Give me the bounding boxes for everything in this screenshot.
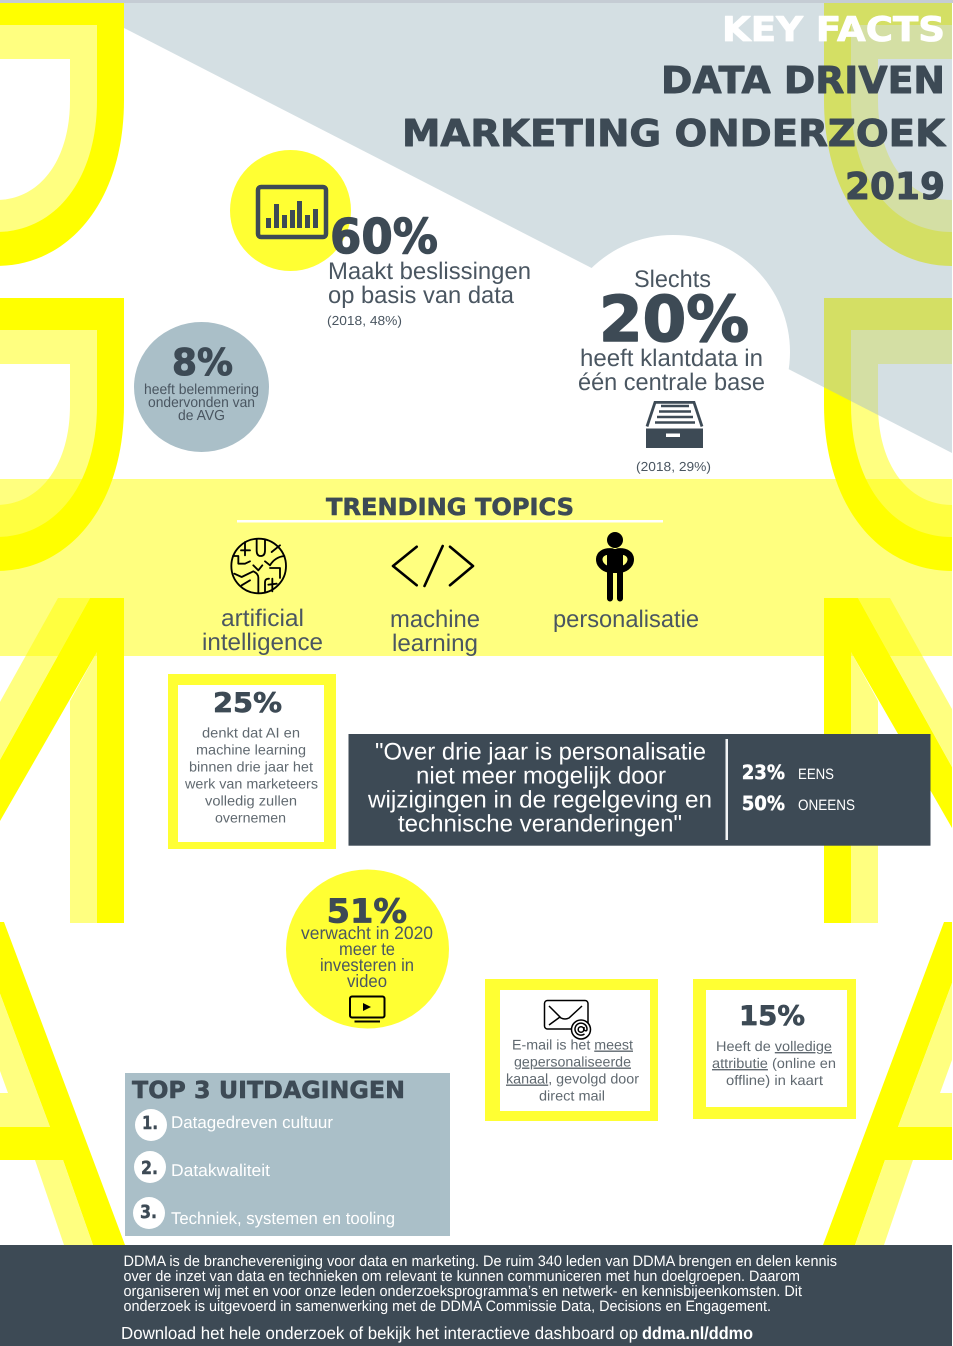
stat description: heeft belemmering: [144, 382, 259, 398]
poll: oneens: ONEENS: [798, 797, 855, 814]
stat description: Maakt beslissingen: [328, 258, 531, 285]
quote: technische veranderingen": [398, 811, 682, 838]
stat description: denkt dat AI en: [202, 724, 300, 740]
topic: machine learning: [390, 606, 480, 657]
quote: "Over drie jaar is personalisatie: [375, 738, 706, 765]
panel: footer: [0, 1245, 952, 1346]
item 1: [135, 1109, 333, 1141]
icon: archive drawer: [646, 402, 703, 448]
panel: e-mail box: [485, 979, 658, 1121]
stat description: investeren in: [320, 955, 414, 975]
download link: Download het hele onderzoek of bekijk het interactieve dashboard op: [121, 1323, 638, 1343]
stat description: [301, 923, 433, 991]
item 3: 3.: [140, 1202, 157, 1223]
heading: TOP 3 UITDAGINGEN: [132, 1076, 405, 1104]
panel: 25% stat box: [168, 674, 336, 849]
title: KEY FACTS: [722, 10, 945, 50]
stat description: heeft klantdata in: [580, 345, 763, 372]
text: gepersonaliseerde: [514, 1054, 631, 1070]
poll: eens: [742, 761, 834, 784]
icon: code brackets: [393, 546, 473, 586]
stat description: meer te: [339, 939, 395, 959]
item 3: Techniek, systemen en tooling: [171, 1209, 395, 1228]
stat description: binnen drie jaar het: [189, 758, 313, 774]
about text: DDMA is de branchevereniging voor data en marketing. De ruim 340 leden van DDMA brengen en delen kennis: [124, 1253, 837, 1270]
stat description: [328, 258, 531, 309]
title: [402, 10, 946, 208]
stat description: offline) in kaart: [726, 1072, 823, 1088]
stat value: 15%: [739, 1001, 805, 1032]
panel: top 3 uitdagingen: [125, 1073, 450, 1236]
quote: niet meer mogelijk door: [416, 762, 666, 789]
stat description: attributie (online en: [712, 1055, 836, 1071]
comparison note: (2018, 48%): [327, 313, 402, 328]
stat description: overnemen: [215, 810, 286, 826]
poll: oneens: 50%: [742, 792, 785, 815]
title: MARKETING ONDERZOEK: [402, 112, 946, 155]
stat description: volledig zullen: [205, 792, 297, 808]
stat description: video: [347, 971, 387, 991]
stat value: 8%: [172, 341, 233, 384]
title: DATA DRIVEN: [661, 59, 945, 102]
panel: 20% stat: [556, 235, 790, 474]
icon: person: [599, 532, 631, 602]
stat description: [578, 345, 765, 396]
about text: [124, 1253, 837, 1315]
item 2: 2.: [141, 1158, 158, 1179]
stat description: ondervonden van: [148, 395, 255, 411]
topic: personalisatie: personalisatie: [553, 606, 699, 633]
topic: artificial intelligence: intelligence: [202, 629, 323, 656]
topic: artificial intelligence: [202, 605, 323, 656]
text: E-mail is het meest: [512, 1036, 633, 1052]
stat description: Heeft de volledige: [716, 1038, 832, 1054]
panel: quote with poll: [348, 734, 930, 846]
text: direct mail: [539, 1088, 605, 1104]
stat description: [712, 1038, 836, 1088]
heading: TRENDING TOPICS: [326, 493, 574, 521]
topic: artificial intelligence: artificial: [221, 605, 304, 632]
icon: mail with at sign: [544, 1000, 590, 1039]
panel: 60% stat: [230, 150, 531, 328]
icon: brain: [231, 539, 286, 593]
topic: machine learning: learning: [392, 630, 478, 657]
stat description: machine learning: [196, 742, 306, 758]
about text: over de inzet van data en technieken om relevant te kunnen communiceren met hun doelgroepen. Daarom: [124, 1268, 800, 1285]
item 1: Datagedreven cultuur: [171, 1113, 333, 1132]
stat description: [144, 382, 259, 424]
about text: organiseren wij met en voor onze leden onderzoeksprogramma’s en netwerk- en kennisbijeenkomsten. Dit: [124, 1283, 803, 1300]
item 3: [133, 1197, 395, 1229]
quote: [367, 738, 712, 838]
stat description: verwacht in 2020: [301, 923, 433, 943]
item 2: [134, 1151, 270, 1183]
comparison note: (2018, 29%): [636, 459, 711, 474]
stat value: 25%: [213, 688, 282, 719]
quote: wijzigingen in de regelgeving en: [367, 786, 712, 814]
stat description: op basis van data: [328, 282, 515, 309]
poll: eens: EENS: [798, 766, 834, 783]
stat lead-in: Slechts: [634, 266, 711, 293]
text: [506, 1036, 639, 1104]
item 2: Datakwaliteit: [171, 1161, 270, 1180]
panel: 15% stat box: [693, 979, 856, 1119]
stat description: [184, 724, 318, 826]
stat value: 20%: [599, 283, 749, 356]
icon: dashboard chart: [230, 150, 351, 271]
item 1: 1.: [142, 1113, 158, 1134]
icon: video screen: [350, 996, 384, 1022]
text: kanaal, gevolgd door: [506, 1070, 639, 1086]
download link: ddma.nl/ddmo: [642, 1323, 753, 1343]
stat value: 60%: [330, 209, 438, 265]
stat description: werk van marketeers: [184, 776, 318, 792]
topic: machine learning: machine: [390, 606, 480, 633]
panel: 8% stat: [134, 322, 269, 452]
poll: oneens: [742, 792, 855, 815]
title: 2019: [845, 165, 945, 208]
panel: 51% stat: [286, 870, 449, 1028]
stat description: de AVG: [178, 408, 225, 424]
stat description: één centrale base: [578, 369, 765, 396]
poll: eens: 23%: [742, 761, 785, 784]
about text: onderzoek is uitgevoerd in samenwerking met de DDMA Commissie Data, Decisions en Engagement.: [124, 1298, 771, 1315]
panel: trending topics: [0, 479, 952, 657]
stat value: 51%: [327, 892, 407, 930]
